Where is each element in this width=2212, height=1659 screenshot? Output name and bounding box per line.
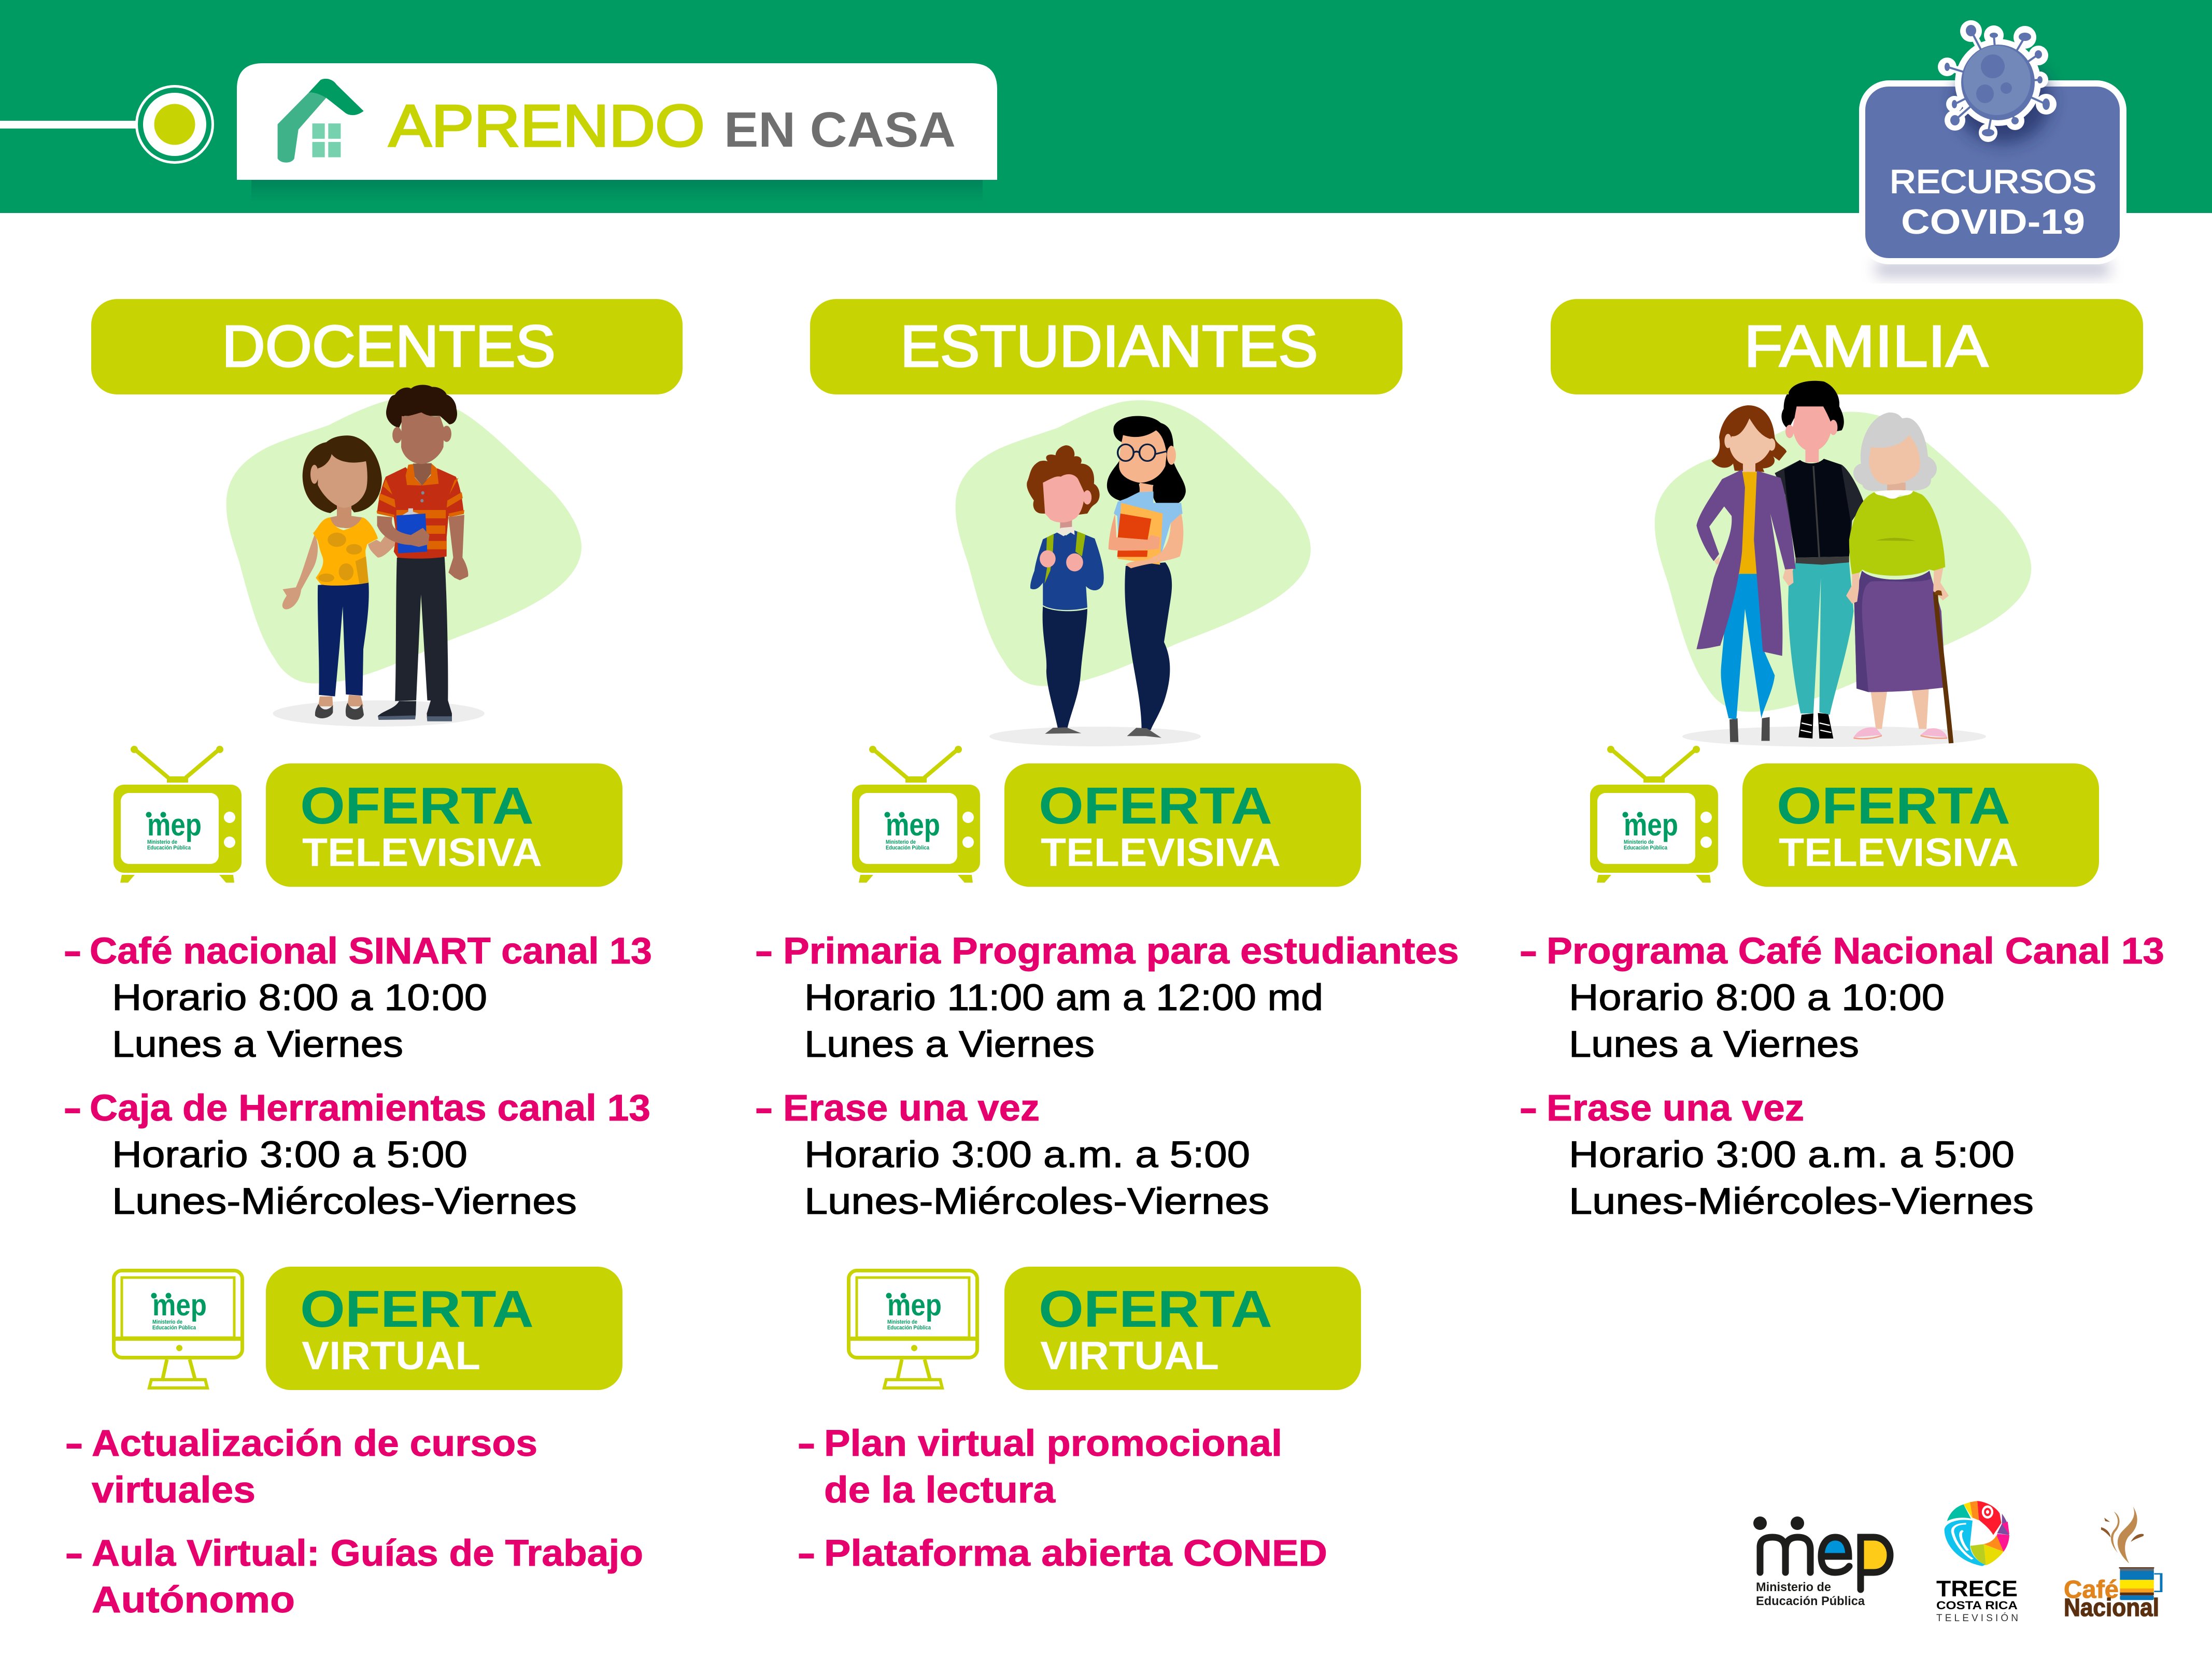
- icon: monitor: mep: [887, 1288, 942, 1322]
- badge text: RECURSOS: RECURSOS: [1890, 164, 2096, 200]
- panel: estudiantes illustration: [956, 400, 1311, 746]
- heading: EN CASA: EN CASA: [724, 102, 956, 158]
- text block: docentes virtual list: Autónomo: [92, 1580, 295, 1621]
- icon: television: mep: [886, 807, 940, 842]
- text block: estudiantes television schedule: -: [755, 1088, 773, 1129]
- figure: man teacher: [377, 386, 468, 721]
- title panel: Aprendo en casa: [237, 63, 997, 180]
- text block: docentes television schedule: Horario 3:00 a 5:00: [112, 1135, 467, 1175]
- icon: television: [1590, 746, 1718, 883]
- text block: estudiantes television schedule: Lunes-Miércoles-Viernes: [804, 1181, 1269, 1222]
- icon: monitor: Educación Pública: [887, 1325, 931, 1331]
- icon: monitor: Ministerio de: [887, 1319, 917, 1325]
- heading pill: ESTUDIANTES: [810, 299, 1402, 394]
- text block: estudiantes television schedule: [755, 931, 1459, 1222]
- icon: house: [278, 79, 364, 163]
- icon: monitor: Educación Pública: [152, 1325, 196, 1331]
- text block: docentes television schedule: Lunes a Viernes: [112, 1024, 403, 1065]
- icon: television: Educación Pública: [1624, 845, 1668, 851]
- logo: mep: Ministerio de: [1756, 1580, 1831, 1594]
- text block: familia television schedule: -: [1519, 931, 1538, 972]
- icon: television: [114, 746, 242, 883]
- connector line and target dot: [0, 85, 214, 164]
- text block: familia television schedule: Lunes a Viernes: [1569, 1024, 1859, 1065]
- pill: oferta televisiva: TELEVISIVA: [1779, 830, 2019, 875]
- text block: estudiantes virtual list: Plan virtual promocional: [824, 1423, 1282, 1464]
- text block: familia television schedule: Erase una vez: [1547, 1088, 1804, 1129]
- pill: oferta virtual: VIRTUAL: [302, 1334, 480, 1378]
- icon: monitor: mep: [152, 1288, 207, 1322]
- text block: docentes television schedule: Lunes-Miércoles-Viernes: [112, 1181, 577, 1222]
- column: familia, oferta televisiva: [1590, 746, 2099, 887]
- text block: estudiantes television schedule: -: [755, 931, 773, 972]
- icon: monitor: [114, 1271, 243, 1388]
- figure: boy student: [1027, 445, 1104, 734]
- pill: oferta televisiva: TELEVISIVA: [302, 830, 542, 875]
- logo: trece costa rica: [1936, 1501, 2018, 1624]
- icon: virus: [1938, 20, 2057, 142]
- icon: television: mep: [147, 807, 202, 842]
- icon: television: [852, 746, 980, 883]
- text block: estudiantes television schedule: Primaria Programa para estudiantes: [783, 931, 1459, 972]
- text block: docentes television schedule: Horario 8:00 a 10:00: [112, 977, 487, 1018]
- column: estudiantes, oferta televisiva: [852, 746, 1361, 887]
- figure: father: [1775, 381, 1864, 739]
- header band: [0, 0, 2212, 213]
- heading pill: DOCENTES: DOCENTES: [222, 314, 556, 379]
- icon: monitor: Ministerio de: [152, 1319, 182, 1325]
- text block: docentes television schedule: Caja de Herramientas canal 13: [90, 1088, 650, 1129]
- text block: familia television schedule: Lunes-Miércoles-Viernes: [1569, 1181, 2034, 1222]
- floor shadow: [1682, 726, 1986, 747]
- icon: coffee mug with steam: [2101, 1507, 2161, 1600]
- pill: oferta televisiva: [1742, 763, 2099, 887]
- text block: familia television schedule: -: [1519, 1088, 1538, 1129]
- figure: grandmother: [1846, 413, 1951, 743]
- logo: mep: [1753, 1516, 1890, 1608]
- text block: estudiantes television schedule: Horario 11:00 am a 12:00 md: [804, 977, 1323, 1018]
- text block: familia television schedule: Horario 3:00 a.m. a 5:00: [1569, 1135, 2015, 1175]
- heading pill: ESTUDIANTES: ESTUDIANTES: [900, 314, 1318, 379]
- logo: cafe nacional: Nacional: [2064, 1594, 2159, 1622]
- icon: television: Ministerio de: [147, 839, 177, 845]
- pill: oferta televisiva: OFERTA: [1777, 777, 2010, 835]
- heading pill: DOCENTES: [91, 299, 683, 394]
- column: docentes, oferta televisiva: [114, 746, 622, 887]
- icon: monitor: [848, 1271, 977, 1388]
- icon: television: mep: [1624, 807, 1678, 842]
- heading: APRENDO: APRENDO: [389, 93, 705, 159]
- text block: familia television schedule: [1519, 931, 2164, 1222]
- pill: oferta televisiva: [266, 763, 622, 887]
- text block: familia television schedule: Horario 8:00 a 10:00: [1569, 977, 1945, 1018]
- logo: cafe nacional: [2064, 1507, 2161, 1622]
- logo: trece costa rica: TRECE: [1936, 1576, 2018, 1601]
- text block: docentes television schedule: -: [63, 931, 82, 972]
- text block: estudiantes virtual list: Plataforma abierta CONED: [824, 1533, 1327, 1574]
- logo: trece costa rica: COSTA RICA: [1936, 1599, 2018, 1612]
- text block: estudiantes virtual list: -: [797, 1533, 816, 1574]
- text block: familia television schedule: Programa Café Nacional Canal 13: [1547, 931, 2164, 972]
- text block: estudiantes television schedule: Horario 3:00 a.m. a 5:00: [804, 1135, 1250, 1175]
- pill: oferta televisiva: OFERTA: [300, 777, 534, 835]
- badge text: COVID-19: COVID-19: [1901, 202, 2085, 242]
- text block: estudiantes virtual list: de la lectura: [824, 1470, 1056, 1511]
- logo: mep: Educación Pública: [1756, 1594, 1865, 1608]
- blob background: [226, 398, 582, 727]
- panel: familia illustration: [1655, 381, 2031, 747]
- text block: docentes television schedule: [63, 931, 652, 1222]
- floor shadow: [989, 727, 1201, 746]
- logo: cafe nacional: Café: [2064, 1576, 2119, 1604]
- column: docentes, oferta virtual: [114, 1267, 622, 1390]
- text block: docentes virtual list: [65, 1423, 643, 1621]
- figure: woman teacher: [282, 435, 395, 720]
- pill: oferta virtual: VIRTUAL: [1040, 1334, 1219, 1378]
- heading pill: FAMILIA: [1551, 299, 2143, 394]
- icon: television: Educación Pública: [147, 845, 191, 851]
- icon: television: Ministerio de: [886, 839, 916, 845]
- pill: oferta virtual: [266, 1267, 622, 1390]
- text block: docentes virtual list: Actualización de cursos: [92, 1423, 537, 1464]
- column: estudiantes, oferta virtual: [848, 1267, 1361, 1390]
- text block: estudiantes television schedule: Lunes a Viernes: [804, 1024, 1095, 1065]
- text block: docentes television schedule: -: [63, 1088, 82, 1129]
- heading pill: FAMILIA: FAMILIA: [1744, 314, 1989, 379]
- text block: docentes virtual list: virtuales: [92, 1470, 256, 1511]
- logo: trece costa rica: TELEVISIÓN: [1936, 1612, 2018, 1624]
- panel: docentes illustration: [226, 386, 582, 727]
- pill: oferta virtual: OFERTA: [300, 1280, 534, 1338]
- blob background: [1655, 412, 2031, 712]
- icon: television: Ministerio de: [1624, 839, 1654, 845]
- text block: estudiantes virtual list: -: [797, 1423, 816, 1464]
- pill: oferta televisiva: OFERTA: [1039, 777, 1272, 835]
- badge: recursos covid-19: [1859, 20, 2126, 276]
- figure: mother: [1696, 405, 1795, 742]
- text block: docentes virtual list: -: [65, 1423, 83, 1464]
- text block: docentes virtual list: -: [65, 1533, 83, 1574]
- pill: oferta virtual: OFERTA: [1039, 1280, 1272, 1338]
- pill: oferta virtual: [1004, 1267, 1361, 1390]
- text block: estudiantes virtual list: [797, 1423, 1327, 1574]
- text block: docentes television schedule: Café nacional SINART canal 13: [90, 931, 652, 972]
- icon: colourful bird ring: [1945, 1501, 2009, 1566]
- pill: oferta televisiva: TELEVISIVA: [1041, 830, 1281, 875]
- blob background: [956, 400, 1311, 686]
- icon: television: Educación Pública: [886, 845, 930, 851]
- figure: girl student: [1107, 416, 1186, 738]
- pill: oferta televisiva: [1004, 763, 1361, 887]
- text block: estudiantes television schedule: Erase una vez: [783, 1088, 1040, 1129]
- text block: docentes virtual list: Aula Virtual: Guías de Trabajo: [92, 1533, 643, 1574]
- hair overlays on heading pills: [387, 381, 1839, 409]
